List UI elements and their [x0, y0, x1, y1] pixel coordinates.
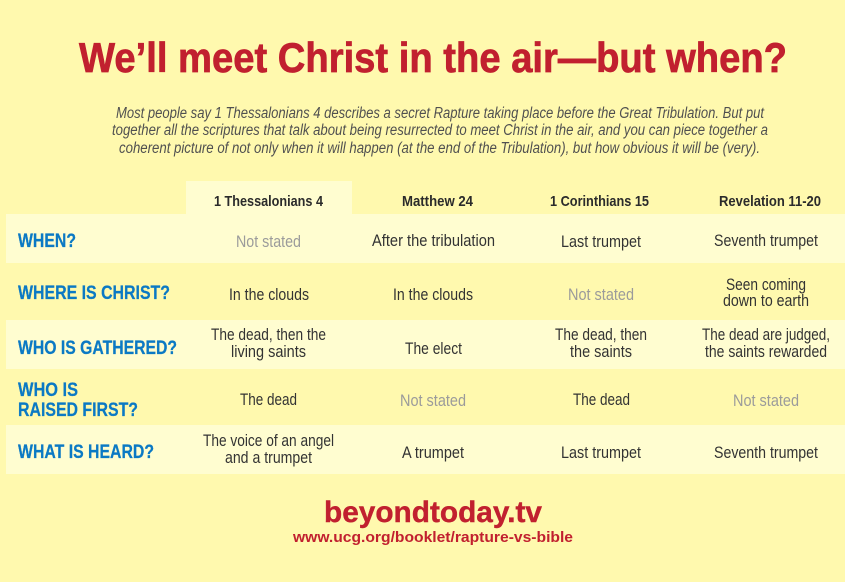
column headers: 1 Corinthians 15 [550, 193, 649, 210]
row: who is gathered: WHO IS GATHERED? [18, 337, 177, 359]
column headers: 1 Thessalonians 4 [214, 193, 324, 210]
row: where is Christ: Seen coming [726, 276, 806, 294]
row: who is raised first: Not stated [400, 392, 466, 410]
row: where is Christ: In the clouds [393, 286, 473, 304]
row: what is heard: and a trumpet [225, 449, 312, 467]
row: who is gathered: The elect [405, 340, 462, 358]
comparison table [6, 181, 845, 474]
row: where is Christ: WHERE IS CHRIST? [18, 282, 170, 304]
website: beyondtoday.tv [324, 496, 542, 529]
row: what is heard: Last trumpet [561, 444, 641, 462]
row: who is gathered: the saints [570, 343, 632, 361]
row: when: After the tribulation [372, 232, 495, 250]
row: who is raised first: The dead [240, 391, 297, 409]
row: what is heard [18, 432, 818, 467]
row: who is gathered [18, 326, 830, 361]
booklet url: www.ucg.org/booklet/rapture-vs-bible [292, 529, 573, 546]
row: who is raised first [18, 379, 799, 421]
row: who is gathered: The dead, then the [211, 326, 326, 344]
row: where is Christ: Not stated [568, 286, 634, 304]
row: what is heard: WHAT IS HEARD? [18, 441, 154, 463]
column headers: Revelation 11-20 [719, 193, 821, 210]
column headers [214, 193, 821, 210]
row: what is heard: Seventh trumpet [714, 444, 818, 462]
title: We’ll meet Christ in the air—but when? [79, 34, 787, 81]
row: where is Christ [18, 276, 809, 310]
row: when: WHEN? [18, 230, 76, 252]
row: when: Not stated [236, 233, 301, 251]
row: where is Christ: In the clouds [229, 286, 309, 304]
row: where is Christ: down to earth [723, 292, 809, 310]
row: when: Last trumpet [561, 233, 641, 251]
row: when: Seventh trumpet [714, 232, 818, 250]
intro paragraph [112, 105, 768, 157]
row: who is gathered: The dead, then [555, 326, 647, 344]
column headers: Matthew 24 [402, 193, 474, 210]
row: who is raised first: RAISED FIRST? [18, 399, 138, 421]
row: who is gathered: the saints rewarded [705, 343, 827, 361]
highlighted column header background [186, 181, 352, 214]
row: what is heard: The voice of an angel [203, 432, 334, 450]
row: who is raised first: WHO IS [18, 379, 78, 401]
row: who is raised first: Not stated [733, 392, 799, 410]
row: when [18, 230, 818, 252]
row: who is raised first: The dead [573, 391, 630, 409]
row: what is heard: A trumpet [402, 444, 464, 462]
row: who is gathered: living saints [231, 343, 306, 361]
row bands [6, 214, 845, 474]
